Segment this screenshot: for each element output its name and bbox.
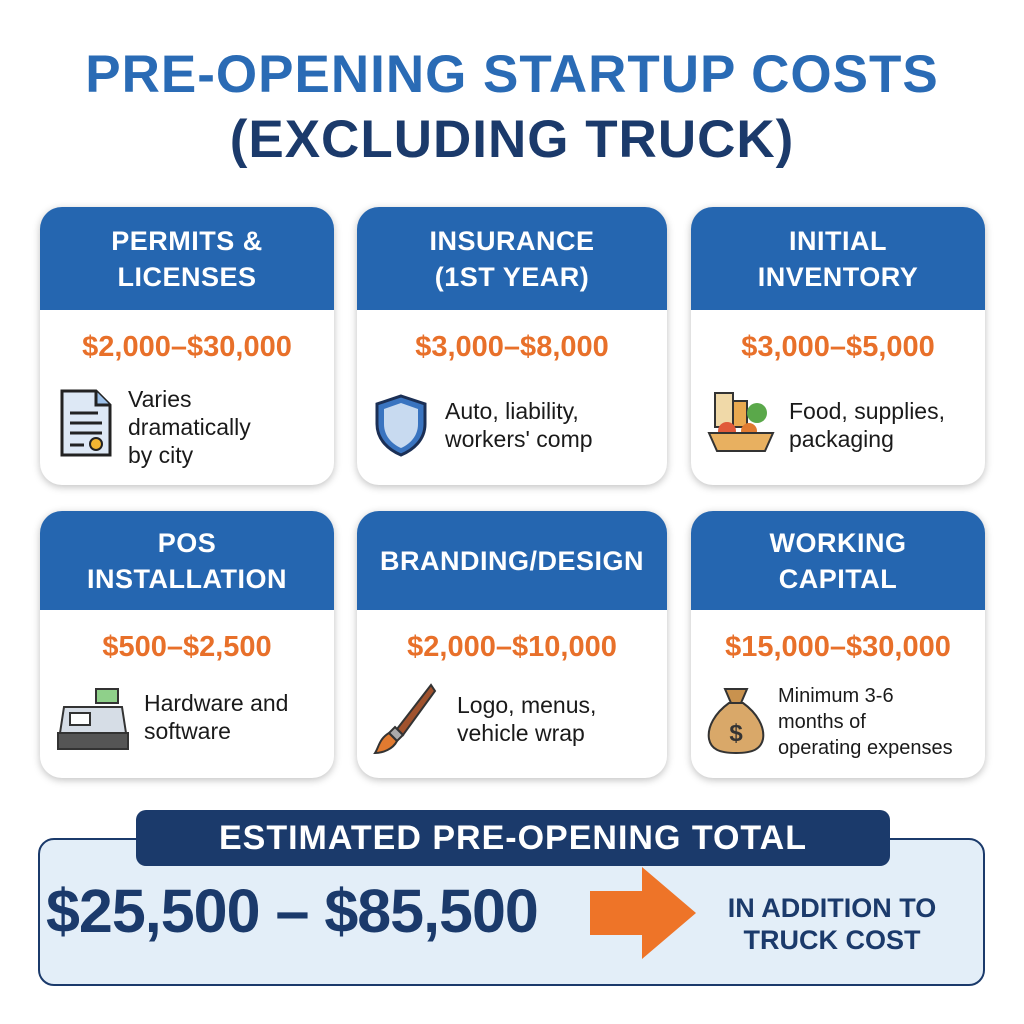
panel: permits: dramatically	[128, 414, 251, 440]
panel: POS: $500–$2,500	[102, 631, 272, 663]
panel: permits	[40, 207, 334, 485]
panel: POS: INSTALLATION	[87, 564, 287, 594]
panel: branding: Logo, menus,	[457, 692, 596, 718]
panel: POS: Hardware and	[144, 690, 288, 716]
panel: inventory: packaging	[789, 426, 894, 452]
icon: money bag: $	[729, 720, 743, 747]
panel: insurance: INSURANCE	[429, 226, 594, 256]
panel: permits: LICENSES	[117, 262, 256, 292]
panel: POS	[40, 511, 334, 778]
panel: permits: by city	[128, 442, 193, 468]
panel: working capital: Minimum 3-6	[778, 685, 894, 707]
panel: working capital: operating expenses	[778, 737, 953, 759]
note: TRUCK COST	[744, 925, 920, 955]
arrow	[590, 867, 696, 959]
total label tab	[136, 810, 890, 866]
panel: total	[38, 838, 985, 986]
panel: branding: $2,000–$10,000	[407, 631, 617, 663]
title line 2: (EXCLUDING TRUCK)	[230, 110, 794, 169]
total label tab: ESTIMATED PRE-OPENING TOTAL	[219, 819, 807, 857]
icon: food basket	[708, 392, 774, 452]
icon: money bag	[708, 688, 764, 754]
panel: POS: software	[144, 718, 231, 744]
panel: working capital: WORKING	[770, 528, 906, 558]
panel: permits: $2,000–$30,000	[82, 331, 292, 363]
panel: inventory: $3,000–$5,000	[741, 331, 935, 363]
panel: POS: POS	[158, 528, 216, 558]
note	[728, 893, 936, 955]
panel: permits: Varies	[128, 386, 192, 412]
panel: working capital: months of	[778, 711, 866, 733]
panel: insurance: Auto, liability,	[445, 398, 579, 424]
panel: insurance	[357, 207, 667, 485]
panel: insurance: $3,000–$8,000	[415, 331, 609, 363]
icon: cash register	[57, 688, 129, 750]
panel: permits: PERMITS &	[111, 226, 263, 256]
panel: insurance: workers' comp	[445, 426, 593, 452]
panel: inventory: INVENTORY	[758, 262, 918, 292]
panel: inventory: Food, supplies,	[789, 398, 945, 424]
icon: paintbrush	[373, 683, 436, 754]
panel: inventory: INITIAL	[789, 226, 887, 256]
icon: document	[60, 390, 112, 456]
panel: branding	[357, 511, 667, 778]
total range: $25,500 – $85,500	[46, 877, 538, 945]
panel: working capital: CAPITAL	[779, 564, 897, 594]
panel: inventory	[691, 207, 985, 485]
title line 1: PRE-OPENING STARTUP COSTS	[85, 45, 939, 104]
panel: insurance: (1ST YEAR)	[435, 262, 589, 292]
note: IN ADDITION TO	[728, 893, 936, 923]
panel: working capital: $15,000–$30,000	[725, 631, 951, 663]
icon: shield	[376, 394, 426, 457]
panel: branding: vehicle wrap	[457, 720, 585, 746]
panel: branding: BRANDING/DESIGN	[380, 546, 644, 576]
panel: working capital	[691, 511, 985, 778]
